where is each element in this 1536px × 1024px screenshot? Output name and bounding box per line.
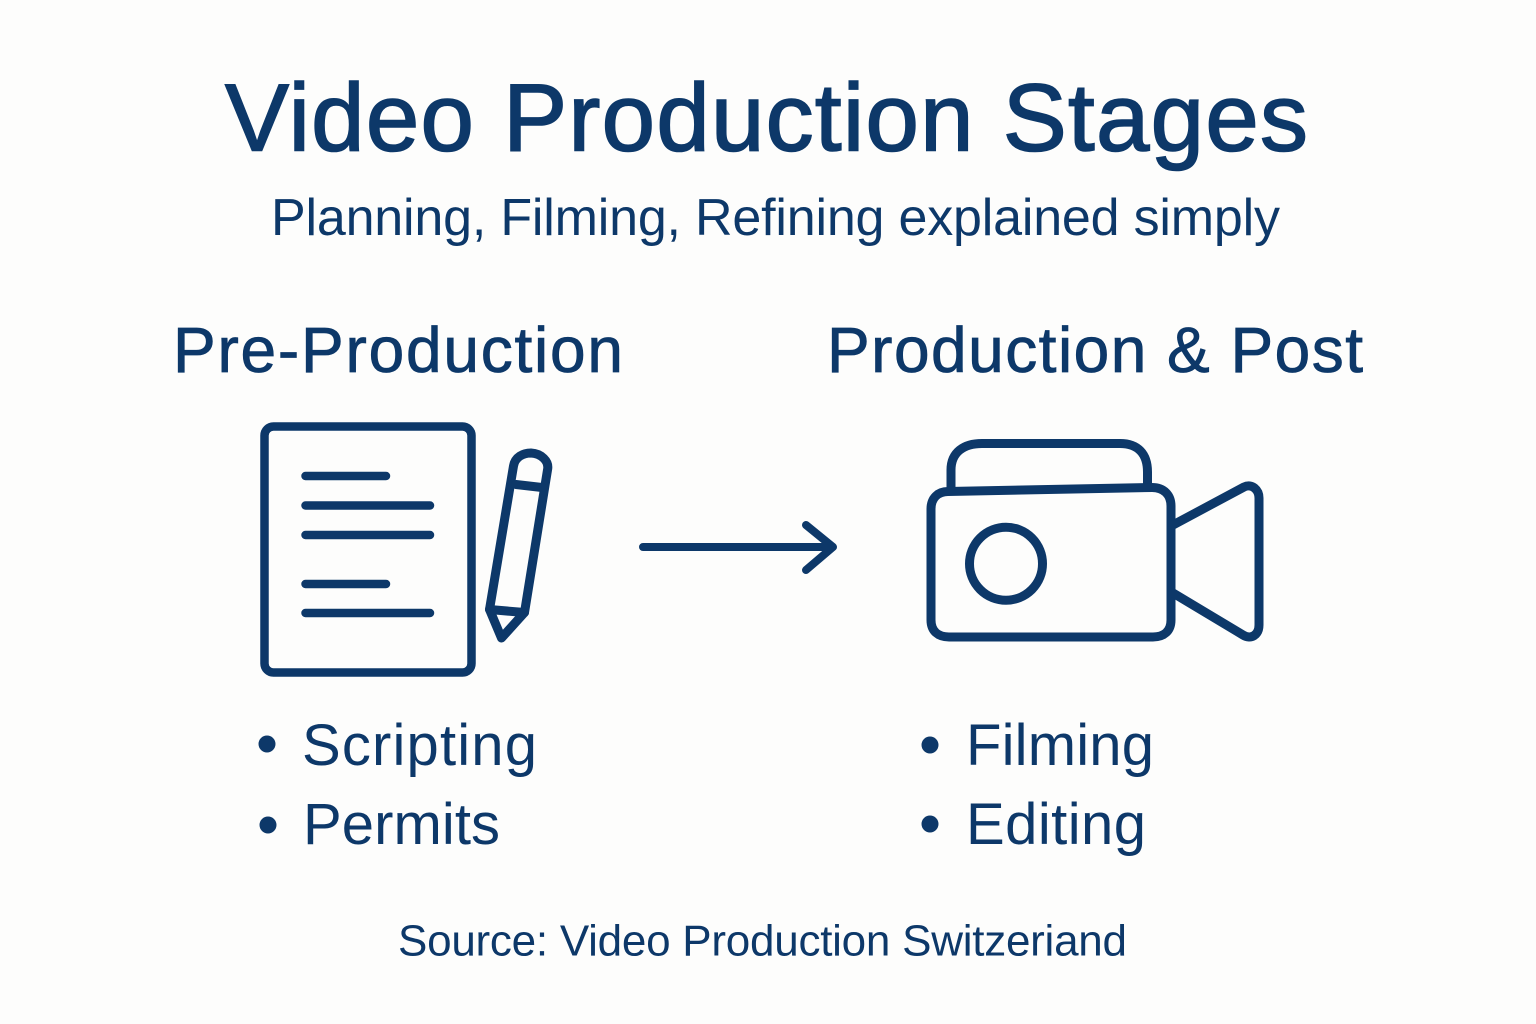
list: production and post items — [922, 713, 1154, 857]
icon: document with text lines — [264, 426, 472, 672]
source note: Source: Video Production Switzeriand — [398, 916, 1127, 966]
list: production and post items: Editing — [966, 792, 1146, 857]
arrow — [643, 525, 833, 570]
subtitle: Planning, Filming, Refining explained simply — [271, 189, 1280, 247]
list: pre-production items: Permits — [303, 792, 500, 857]
heading: Pre-Production: Pre-Production — [173, 314, 623, 386]
icon: pencil — [490, 453, 548, 638]
list: production and post items: Filming — [966, 713, 1154, 778]
list: pre-production items — [258, 713, 537, 857]
list: pre-production items: Scripting — [302, 713, 537, 778]
heading: Production & Post: Production & Post — [827, 314, 1363, 386]
title: Video Production Stages — [225, 64, 1308, 172]
icon: video camera — [931, 444, 1259, 637]
